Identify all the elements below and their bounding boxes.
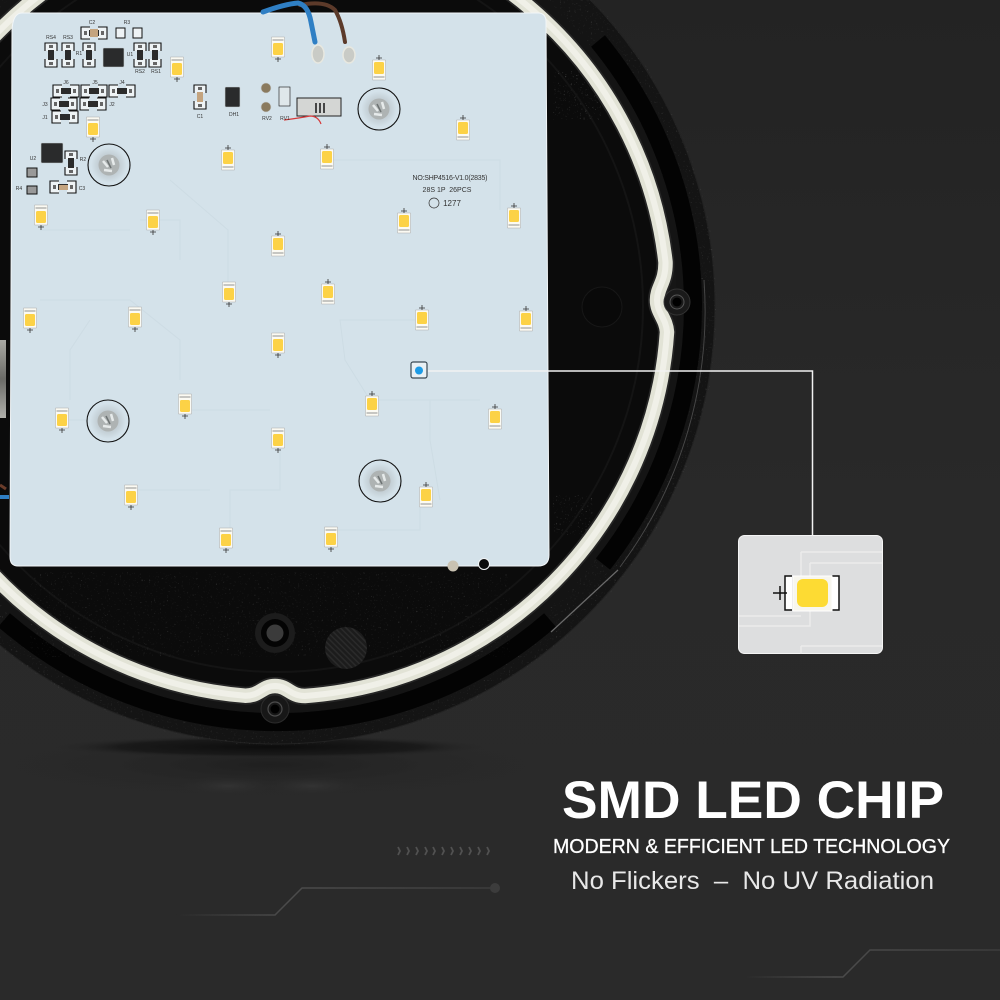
callout marker and leader line (411, 362, 812, 536)
silkscreen labels: DH1 (229, 112, 239, 118)
silkscreen labels: J3 (42, 102, 48, 108)
silkscreen labels (16, 20, 290, 192)
wire ends and connector at left edge (0, 340, 9, 497)
silkscreen labels: RS4 (46, 35, 56, 41)
solder joints (312, 45, 355, 63)
recessed black channel (4, 41, 705, 722)
silkscreen labels: J4 (119, 80, 125, 86)
silkscreen labels: U2 (30, 156, 36, 162)
copper traces (40, 160, 500, 530)
screw hole bottom (261, 695, 289, 723)
screw hole right (664, 289, 690, 315)
decorative circuit line left (176, 883, 500, 915)
inner bowl (0, 0, 677, 706)
silkscreen labels: R3 (124, 20, 130, 26)
board (10, 13, 549, 566)
silkscreen labels: C2 (89, 20, 95, 26)
board marking (412, 175, 488, 208)
board marking: 1277 (443, 199, 461, 208)
decorative circuit line right (744, 950, 1000, 977)
white gasket with notches (0, 0, 667, 696)
silkscreen labels: RS2 (135, 69, 145, 75)
LED circuit board (10, 3, 549, 572)
silkscreen labels: RS3 (63, 35, 73, 41)
dark bowl floor (0, 0, 660, 689)
silkscreen labels: C3 (79, 186, 85, 192)
silkscreen labels: J5 (92, 80, 98, 86)
wires (263, 3, 345, 42)
board marking: 28S 1P 26PCS (423, 187, 472, 194)
silkscreen labels: J1 (42, 115, 48, 121)
decorative chevrons (398, 847, 489, 855)
feature line: No Flickers – No UV Radiation (571, 867, 934, 895)
faint moulded circle (582, 287, 622, 327)
callout card: LED close-up (738, 536, 882, 654)
silkscreen labels: J2 (109, 102, 115, 108)
lamp shadow (10, 735, 530, 796)
board holes (448, 558, 490, 572)
hatched disc (325, 627, 367, 669)
board marking: NO:SHP4516-V1.0(2835) (412, 175, 488, 182)
faint bowl step (0, 0, 643, 672)
silkscreen labels: RV2 (262, 116, 272, 122)
lamp housing (0, 0, 730, 755)
IC chips (41, 48, 290, 163)
silkscreen labels: RS1 (151, 69, 161, 75)
screws (87, 88, 401, 502)
connector (284, 98, 341, 124)
silkscreen labels: C1 (197, 114, 203, 120)
LED chips (24, 37, 532, 553)
silkscreen labels: RV1 (280, 116, 290, 122)
silkscreen labels: R1 (76, 51, 82, 57)
close-up LED chip (773, 576, 839, 611)
title: SMD LED CHIP (562, 771, 944, 830)
silkscreen labels: R4 (16, 186, 22, 192)
subtitle: MODERN & EFFICIENT LED TECHNOLOGY (553, 836, 950, 858)
mounting hole (255, 613, 295, 653)
bowl speckle patches (30, 70, 601, 657)
small components (27, 27, 206, 194)
silkscreen labels: J6 (63, 80, 69, 86)
silkscreen labels: U1 (127, 52, 133, 58)
rim speckle (0, 0, 730, 755)
silkscreen labels: R2 (80, 157, 86, 163)
outer rim (0, 0, 715, 744)
